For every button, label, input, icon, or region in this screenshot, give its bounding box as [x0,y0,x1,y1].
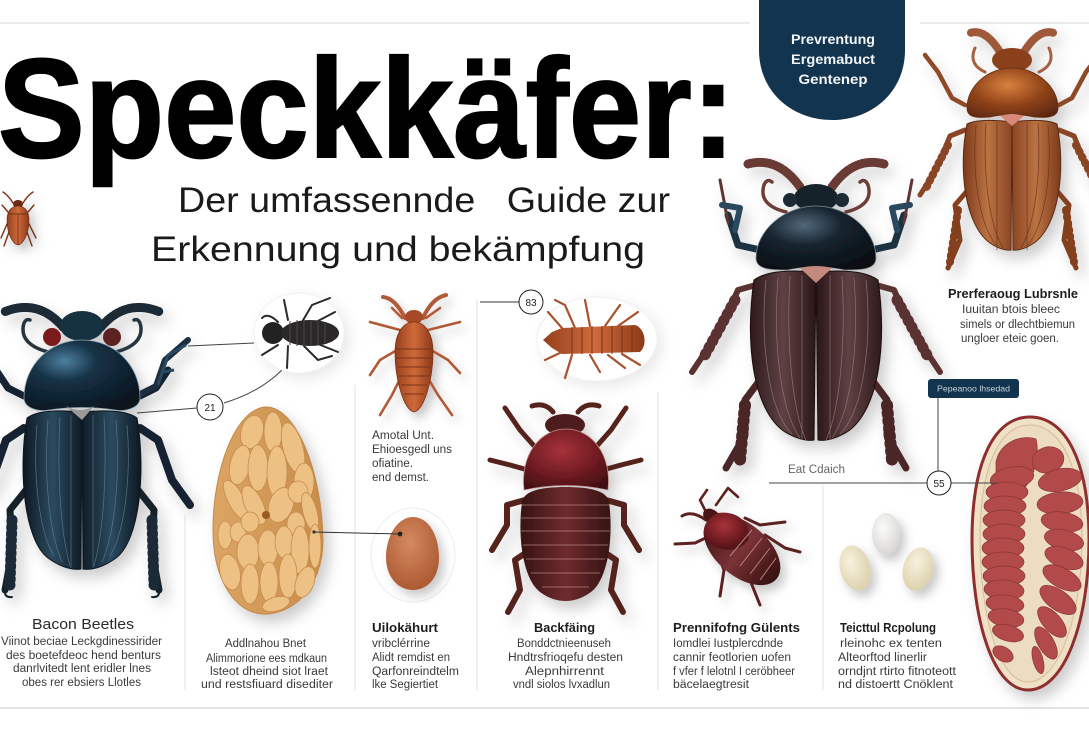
text: kernel description: lsteot dheind siot lraet [210,666,329,678]
navy badge: Gentenep [798,72,868,87]
navy badge: Prevrentung [791,32,875,47]
subtitle: Der umfassennde Guide zur [178,181,670,220]
text: Teicttul Rcpolung: rleinohc ex tenten [840,638,942,650]
icon: orange larva [370,295,460,415]
antenna and legs, left half [0,307,63,597]
text: Uilokähurt [372,620,459,691]
right half mirrored [565,405,641,612]
text: Backfäing: Bonddctnieenuseh [517,638,611,650]
leader lines and marker 21: 21 [204,403,216,414]
text: Prennifofng Gülents: f vfer f lelotnl I ceröbheer [673,666,795,678]
text: Bacon Beetles: danrlvitedt lent eridler lnes [13,663,151,675]
text: larva note: Amotal Unt. [372,430,434,442]
text: larva note [372,430,452,484]
text: Prerferaoug Lubrsnle: simels or dlechtbiemun [960,319,1075,331]
text: Teicttul Rcpolung: nd distoertt Cnöklent [838,679,954,691]
text: Prennifofng Gülents: Prennifofng Gülents [673,620,800,635]
beetle: dark red grub-beetle [490,405,641,612]
icon: three eggs [835,513,938,594]
text: kernel description: Addlnahou Bnet [225,638,307,650]
text: Teicttul Rcpolung: Teicttul Rcpolung [840,620,936,635]
text: Prerferaoug Lubrsnle [948,286,1078,345]
navy badge [759,0,905,120]
text: Teicttul Rcpolung [838,620,957,691]
column dividers [185,300,823,690]
icon: orange larva in oval [537,297,657,381]
text: Prerferaoug Lubrsnle: Prerferaoug Lubrsnle [948,286,1078,301]
connector with marker 55: 55 [933,479,945,490]
icon: brown egg [371,508,455,602]
top rule right [920,22,1089,24]
text: Backfäing: vndl siolos lvxadlun [513,679,610,691]
connector with marker 55 [769,398,997,495]
text: Prennifofng Gülents: Iomdlei Iustplercdnde [673,638,783,650]
text: kernel description [201,638,333,691]
navy badge: Ergemabuct [791,52,876,67]
bacon cross-section [972,417,1089,690]
text: larva note: end demst. [372,472,429,484]
navy tag: Pepeanoo lhsedad [937,384,1010,394]
right half mirrored [816,162,940,468]
text: Prennifofng Gülents: bäcelaegtresit [673,679,750,691]
text: Bacon Beetles: obes rer ebsiers Llotles [22,677,141,689]
beetle: brown adult top right [920,32,1089,268]
right half mirrored [82,307,190,597]
text: kernel description: Alimmorione ees mdkaun [206,653,327,665]
title: Speckkäfer: [0,29,735,187]
text: Backfäing [508,620,623,691]
beetle: large dark adult [692,162,940,468]
text: Bacon Beetles [1,616,162,689]
text: Uilokähurt: vribclérrine [372,638,430,650]
bottom rule [0,707,1089,709]
text: Prerferaoug Lubrsnle: ungloer eteic goen. [961,333,1059,345]
text: Bacon Beetles: Viinot beciae Leckgdinessirider [1,636,162,648]
text: Backfäing: Backfäing [534,620,595,635]
text: larva note: Ehioesgedl uns [372,444,452,456]
text: Teicttul Rcpolung: Alteorftod linerlir [838,652,927,664]
text: Eat Cdaich: Eat Cdaich [788,464,845,476]
text: Uilokähurt: lke Segiertiet [372,679,439,691]
text: Uilokähurt: Alidt remdist en [372,652,450,664]
icon: dark larva in circle [254,293,344,373]
text: Prerferaoug Lubrsnle: Iuuitan btois bleec [962,304,1060,316]
top rule left [0,22,750,24]
right foreleg claw [140,340,188,394]
subtitle [151,181,670,269]
food kernel illustration [213,407,323,614]
icon: small beetle top left [1,192,36,246]
marker 83: 83 [525,298,537,309]
text: Backfäing: Alepnhirrennt [525,666,605,678]
text: Teicttul Rcpolung: orndjnt rtirto fitnoteott [838,666,957,678]
text: Uilokähurt: Qarfonreindtelm [372,666,459,678]
leader line to egg [312,530,402,536]
subtitle: Erkennung und bekämpfung [151,230,645,269]
text: Prennifofng Gülents: cannir feotlorien uofen [673,652,791,664]
text: Uilokähurt: Uilokähurt [372,620,439,635]
text: Prennifofng Gülents [673,620,800,691]
marker 83 [480,290,543,314]
navy tag [928,379,1019,398]
beetle: diagonal red beetle [675,488,800,605]
text: Bacon Beetles: des boetefdeoc hend benturs [6,650,161,662]
text: kernel description: und restsfiuard disediter [201,679,333,691]
text: Backfäing: Hndtrsfrioqefu desten [508,652,623,664]
right half mirrored [1012,32,1089,268]
text: larva note: ofiatine. [372,458,413,470]
text: Bacon Beetles: Bacon Beetles [32,616,134,633]
beetle: blue-black adult [0,307,190,597]
leader lines and marker 21 [137,343,282,420]
